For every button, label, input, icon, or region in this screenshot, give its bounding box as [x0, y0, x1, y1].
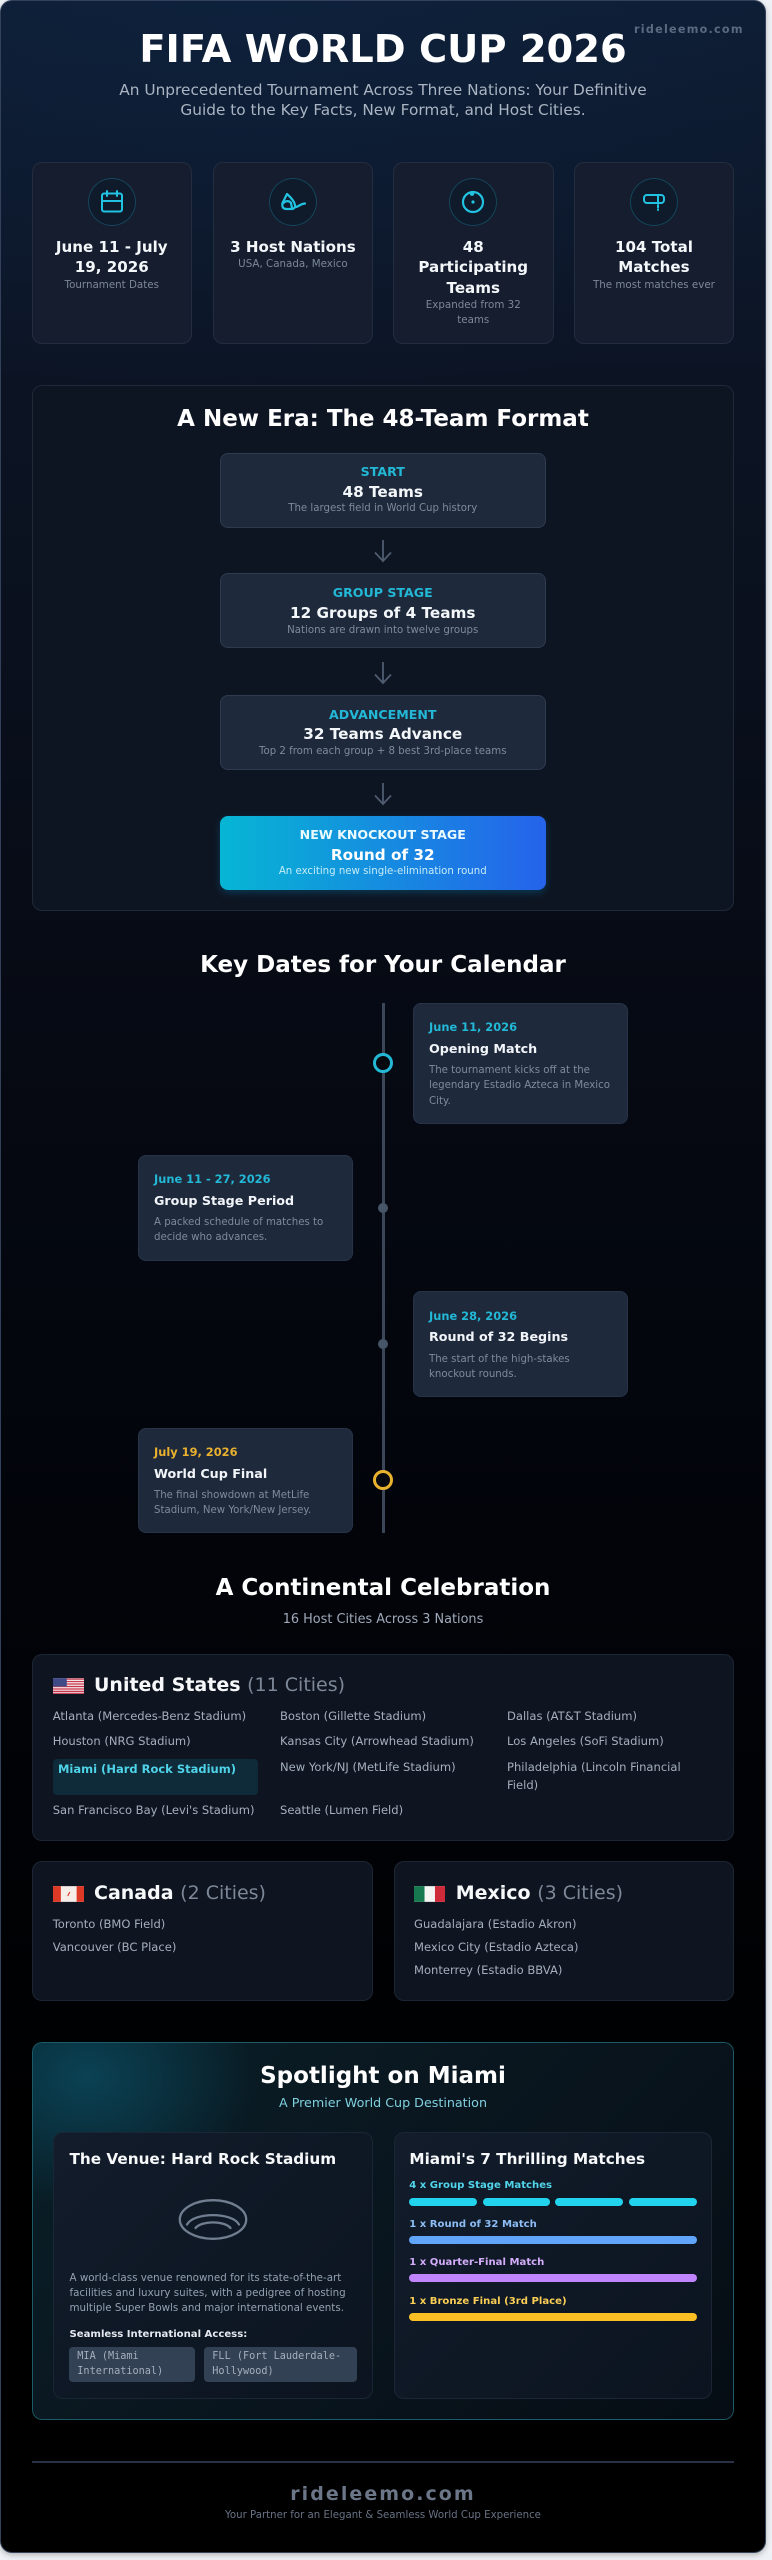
- event name: World Cup Final: [154, 1466, 267, 1480]
- watermark: rideleemo.com: [634, 23, 744, 36]
- step label: ADVANCEMENT: [329, 707, 436, 722]
- step: start: [220, 452, 546, 528]
- event: group stage: [138, 1154, 352, 1260]
- match row: quarter-final: 1 x Quarter-Final Match: [409, 2257, 544, 2268]
- stat value: Participating: [418, 258, 528, 276]
- step value: Round of 32: [331, 846, 435, 864]
- subtitle: Guide to the Key Facts, New Format, and Host Cities.: [180, 101, 586, 119]
- description: knockout rounds.: [429, 1369, 517, 1380]
- match row: round of 32: [409, 2219, 697, 2244]
- icon: stadium: [178, 2199, 248, 2240]
- stat caption: teams: [457, 314, 489, 326]
- marker: group stage: [378, 1202, 388, 1212]
- step label: START: [361, 464, 405, 479]
- description: The start of the high-stakes: [429, 1354, 570, 1364]
- cities: Vancouver (BC Place): [53, 1940, 176, 1954]
- description: The tournament kicks off at the: [429, 1065, 590, 1076]
- match row: group stage: [409, 2180, 697, 2206]
- step note: Nations are drawn into twelve groups: [287, 625, 478, 636]
- subheading: A Premier World Cup Destination: [279, 2095, 487, 2110]
- description: City.: [429, 1096, 451, 1107]
- event: final: [138, 1428, 352, 1533]
- heading: continental: A Continental Celebration: [216, 1574, 550, 1600]
- cities: Los Angeles (SoFi Stadium): [507, 1734, 664, 1748]
- icon: nations: [269, 178, 317, 226]
- airport: MIA: [69, 2347, 195, 2382]
- cities: Kansas City (Arrowhead Stadium): [280, 1734, 474, 1748]
- card: matches: [394, 2132, 712, 2399]
- marker: opening: [373, 1053, 393, 1073]
- cities: Toronto (BMO Field): [53, 1917, 165, 1931]
- icon: teams: [449, 178, 497, 226]
- heading: Spotlight on Miami: [260, 2063, 506, 2089]
- stat card: nations: [213, 162, 373, 344]
- access heading: Seamless International Access:: [70, 2329, 247, 2340]
- step: advancement: [220, 695, 546, 770]
- stat value: 3 Host Nations: [230, 238, 356, 256]
- cities: Mexico City (Estadio Azteca): [414, 1940, 579, 1954]
- event name: Round of 32 Begins: [429, 1329, 568, 1344]
- cities: Dallas (AT&T Stadium): [507, 1709, 637, 1723]
- venue description: facilities and luxury suites, with a pedigree of hosting: [70, 2287, 346, 2299]
- highlighted city: Miami: Miami (Hard Rock Stadium): [58, 1762, 236, 1776]
- match row: group stage: 4 x Group Stage Matches: [409, 2180, 552, 2191]
- stat value: Matches: [618, 258, 690, 276]
- step: group stage: [220, 573, 546, 648]
- match row: bronze final: 1 x Bronze Final (3rd Place): [409, 2296, 567, 2307]
- stat caption: Expanded from 32: [426, 299, 521, 311]
- stat value: [615, 238, 693, 276]
- title: FIFA WORLD CUP 2026: [139, 27, 627, 72]
- footer divider: [32, 2461, 734, 2462]
- subheading: 16 Host Cities Across 3 Nations: [283, 1612, 483, 1627]
- date: June 11 - 27, 2026: [154, 1172, 271, 1186]
- card: venue: [53, 2132, 373, 2399]
- subtitle: An Unprecedented Tournament Across Three Nations: Your Definitive: [119, 81, 647, 99]
- panel: Mexico: [394, 1861, 734, 2001]
- marker: final: [373, 1470, 393, 1490]
- cities: [52, 1917, 176, 1954]
- date: July 19, 2026: [154, 1445, 238, 1459]
- stat card: dates: [32, 162, 192, 344]
- cities: San Francisco Bay (Levi's Stadium): [53, 1803, 254, 1817]
- cities: Boston (Gillette Stadium): [280, 1709, 426, 1723]
- stat value: [418, 238, 528, 297]
- flag: Canada: [53, 1886, 84, 1902]
- date: June 11, 2026: [429, 1020, 517, 1034]
- step value: 32 Teams Advance: [303, 725, 462, 743]
- card heading: The Venue: Hard Rock Stadium: [70, 2150, 336, 2168]
- description: [429, 1354, 570, 1380]
- marker: round of 32: [378, 1338, 388, 1348]
- cities: Houston (NRG Stadium): [53, 1734, 191, 1748]
- stat value: [55, 238, 168, 276]
- stat caption: USA, Canada, Mexico: [238, 258, 348, 270]
- description: The final showdown at MetLife: [154, 1490, 309, 1501]
- stat caption: Tournament Dates: [65, 278, 159, 290]
- country heading: Mexico (3 Cities): [456, 1882, 623, 1904]
- cities: New York/NJ (MetLife Stadium): [280, 1760, 456, 1774]
- timeline axis: [382, 1002, 384, 1533]
- airport: FLL: FLL (Fort Lauderdale-: [212, 2351, 341, 2362]
- step value: 12 Groups of 4 Teams: [290, 604, 476, 622]
- heading: key dates: Key Dates for Your Calendar: [200, 952, 566, 978]
- step note: Top 2 from each group + 8 best 3rd-place teams: [259, 746, 506, 757]
- arrow: [374, 783, 392, 806]
- description: [154, 1490, 311, 1516]
- description: [154, 1217, 323, 1243]
- stat value: June 11 - July: [56, 238, 168, 256]
- panel: Spotlight on Miami: [32, 2042, 734, 2420]
- icon: matches: [630, 178, 678, 226]
- stat value: 19, 2026: [75, 258, 149, 276]
- country heading: United States (11 Cities): [94, 1674, 345, 1696]
- highlighted city: Miami: [53, 1759, 258, 1795]
- venue description: A world-class venue renowned for its state-of-the-art: [70, 2272, 341, 2284]
- match row: round of 32: 1 x Round of 32 Match: [409, 2219, 537, 2230]
- stat value: 104 Total: [615, 238, 693, 256]
- cities: Atlanta (Mercedes-Benz Stadium): [53, 1709, 246, 1723]
- event: opening match: [413, 1002, 628, 1124]
- cities: Seattle (Lumen Field): [280, 1803, 403, 1817]
- airport: MIA: International): [77, 2366, 163, 2377]
- stat value: 48: [463, 238, 484, 256]
- cities: Philadelphia (Lincoln Financial: [507, 1760, 681, 1774]
- description: A packed schedule of matches to: [154, 1217, 323, 1228]
- airport: FLL: [204, 2347, 357, 2382]
- arrow: [374, 662, 392, 684]
- cities: [52, 1709, 681, 1817]
- match row: quarter-final: [409, 2257, 697, 2282]
- stat card: matches: [574, 162, 734, 344]
- airport: MIA: MIA (Miami: [77, 2351, 139, 2362]
- flag: USA: [53, 1678, 84, 1694]
- step note: The largest field in World Cup history: [288, 503, 477, 514]
- heading: A New Era: The 48-Team Format: [177, 406, 589, 432]
- airport: FLL: Hollywood): [212, 2366, 274, 2377]
- stat caption: The most matches ever: [593, 278, 715, 290]
- step label: NEW KNOCKOUT STAGE: [300, 827, 466, 842]
- icon: calendar: [88, 178, 136, 226]
- venue description: [70, 2272, 346, 2314]
- arrow: [374, 540, 392, 562]
- step: knockout stage: [220, 816, 546, 890]
- description: Stadium, New York/New Jersey.: [154, 1505, 311, 1516]
- cities: Guadalajara (Estadio Akron): [414, 1917, 576, 1931]
- step label: GROUP STAGE: [333, 585, 433, 600]
- step note: An exciting new single-elimination round: [279, 866, 487, 877]
- panel: 48-team format: [32, 385, 734, 911]
- venue description: multiple Super Bowls and major international events.: [70, 2302, 344, 2314]
- event name: Opening Match: [429, 1040, 537, 1056]
- country heading: Canada (2 Cities): [94, 1882, 266, 1904]
- match row: bronze final: [409, 2296, 697, 2321]
- flag: Mexico: [414, 1886, 445, 1902]
- subtitle: [119, 81, 647, 119]
- stat caption: [426, 299, 521, 326]
- footer brand: rideleemo.com: [290, 2483, 476, 2505]
- date: June 28, 2026: [429, 1308, 517, 1322]
- cities: [414, 1917, 579, 1977]
- description: legendary Estadio Azteca in Mexico: [429, 1080, 610, 1091]
- description: [429, 1065, 610, 1107]
- footer tagline: Your Partner for an Elegant & Seamless World Cup Experience: [225, 2510, 541, 2521]
- step value: 48 Teams: [342, 482, 423, 500]
- event name: Group Stage Period: [154, 1192, 294, 1208]
- panel: United States: [32, 1654, 734, 1841]
- cities: Field): [507, 1778, 538, 1792]
- timeline: [138, 1003, 628, 1533]
- stat card: teams: [393, 162, 554, 344]
- card heading: Miami's 7 Thrilling Matches: [409, 2150, 645, 2168]
- stat value: Teams: [447, 279, 500, 297]
- cities: Monterrey (Estadio BBVA): [414, 1963, 562, 1977]
- panel: Canada: [32, 1861, 373, 2001]
- description: decide who advances.: [154, 1232, 267, 1243]
- event: round of 32: [413, 1291, 628, 1396]
